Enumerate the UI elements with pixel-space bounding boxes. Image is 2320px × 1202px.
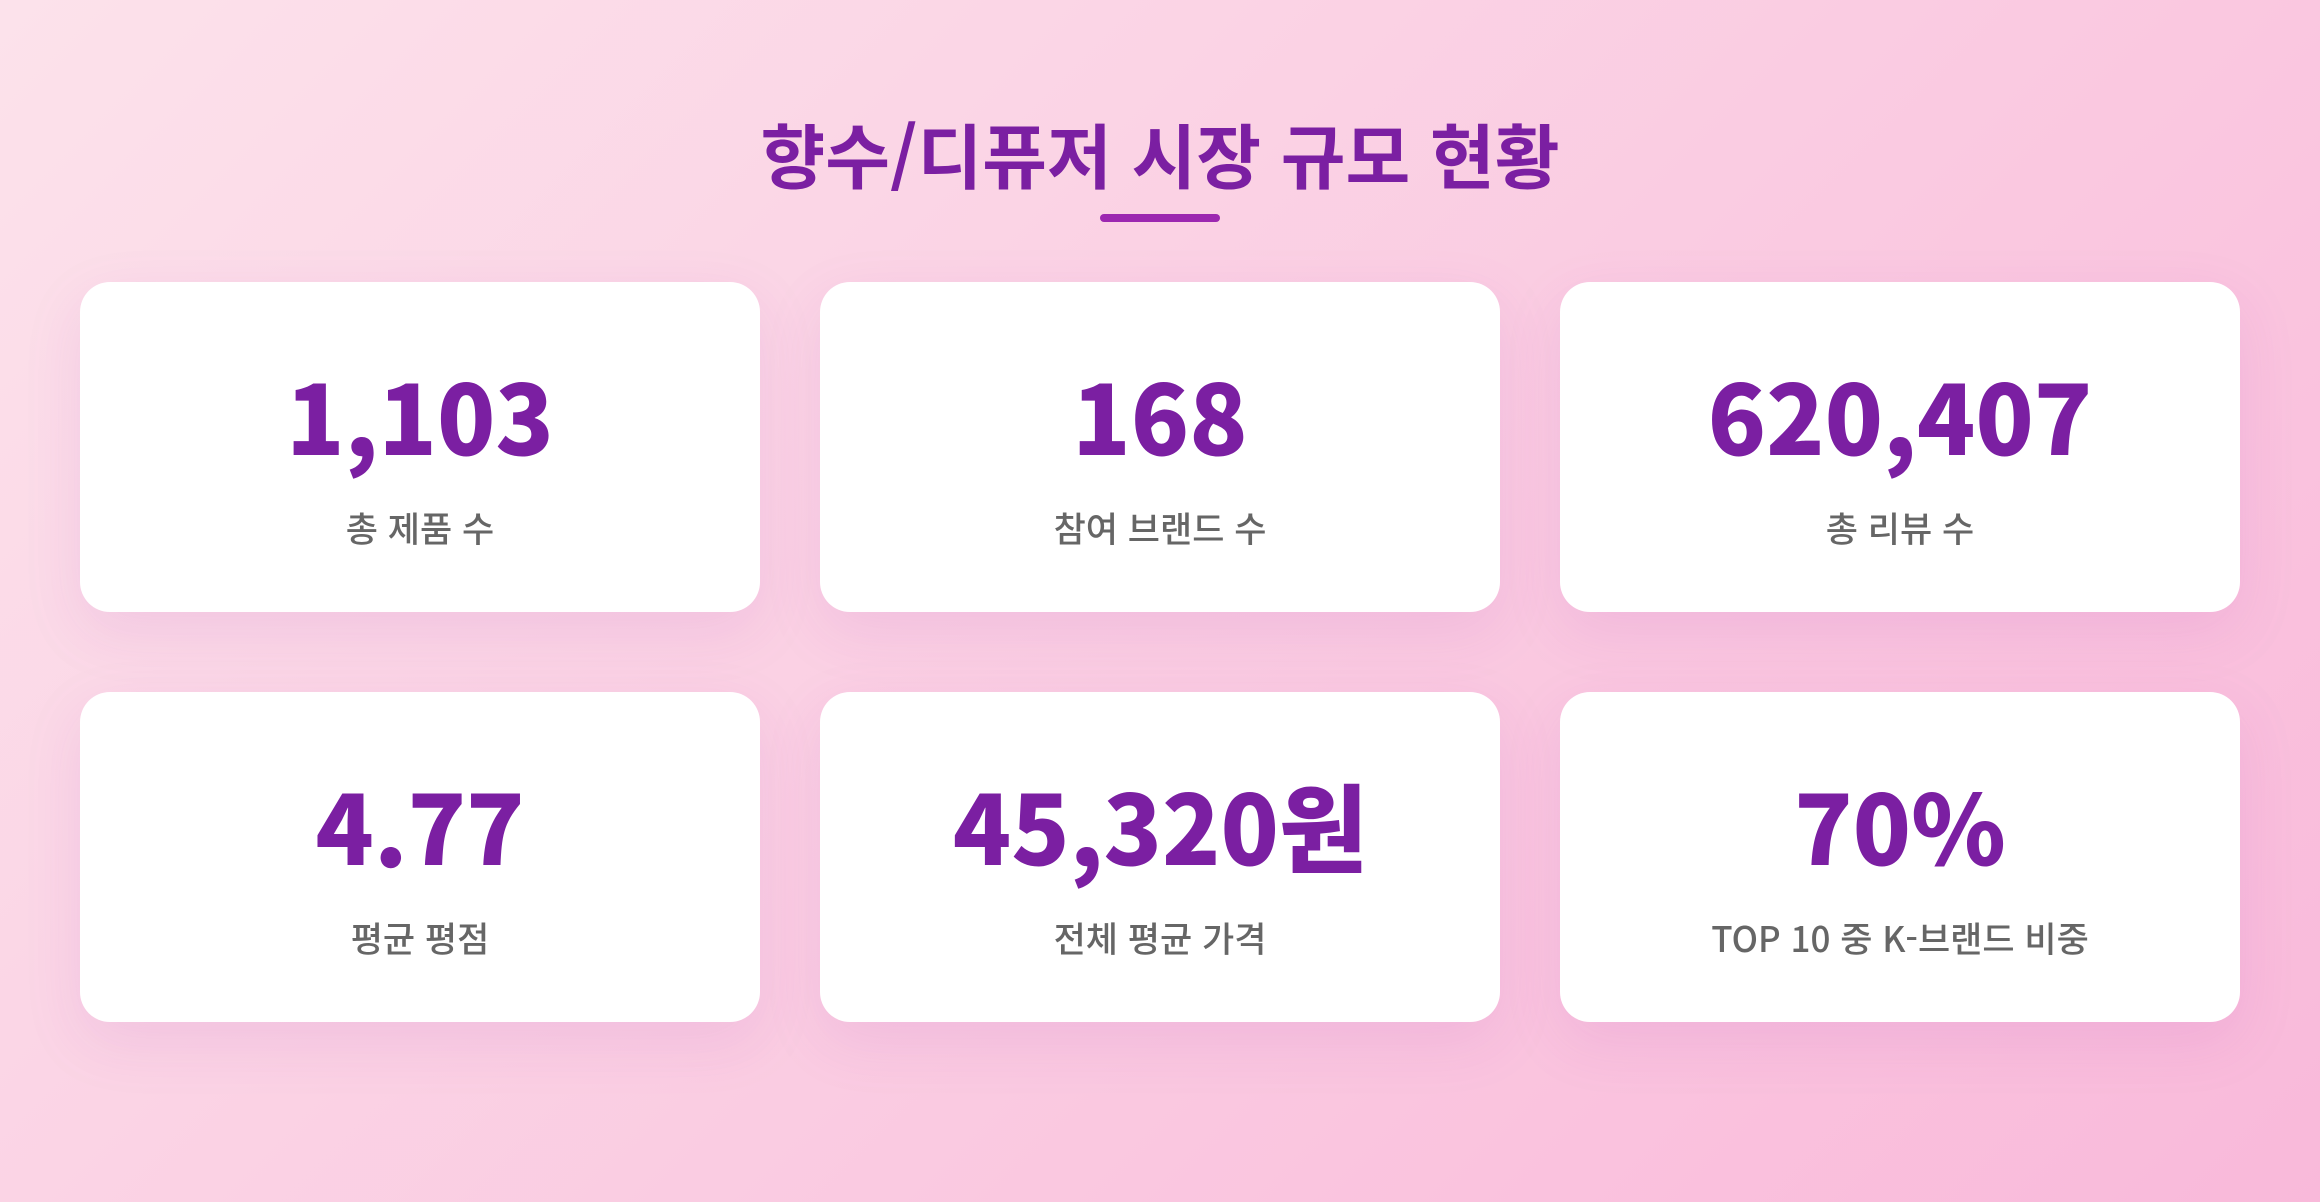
title: 향수/디퓨저 시장 규모 현황 — [761, 102, 1559, 204]
panel: total products — [80, 282, 760, 612]
title underline — [1100, 214, 1220, 222]
panel: participating brands — [820, 282, 1500, 612]
label: average rating: 평균 평점 — [351, 912, 489, 963]
panel: K-brand share — [1560, 692, 2240, 1022]
value: total reviews: 620,407 — [1708, 344, 2092, 483]
panel: average rating — [80, 692, 760, 1022]
panel: total reviews — [1560, 282, 2240, 612]
value: average price: 45,320원 — [953, 754, 1367, 893]
label: average price: 전체 평균 가격 — [1054, 912, 1266, 963]
value: total products: 1,103 — [286, 344, 554, 483]
panel: average price — [820, 692, 1500, 1022]
label: K-brand share: TOP 10 중 K-브랜드 비중 — [1711, 912, 2089, 963]
value: average rating: 4.77 — [315, 754, 525, 893]
label: participating brands: 참여 브랜드 수 — [1054, 502, 1266, 553]
value: K-brand share: 70% — [1794, 754, 2006, 893]
label: total reviews: 총 리뷰 수 — [1826, 502, 1974, 553]
value: participating brands: 168 — [1072, 344, 1248, 483]
label: total products: 총 제품 수 — [346, 502, 494, 553]
